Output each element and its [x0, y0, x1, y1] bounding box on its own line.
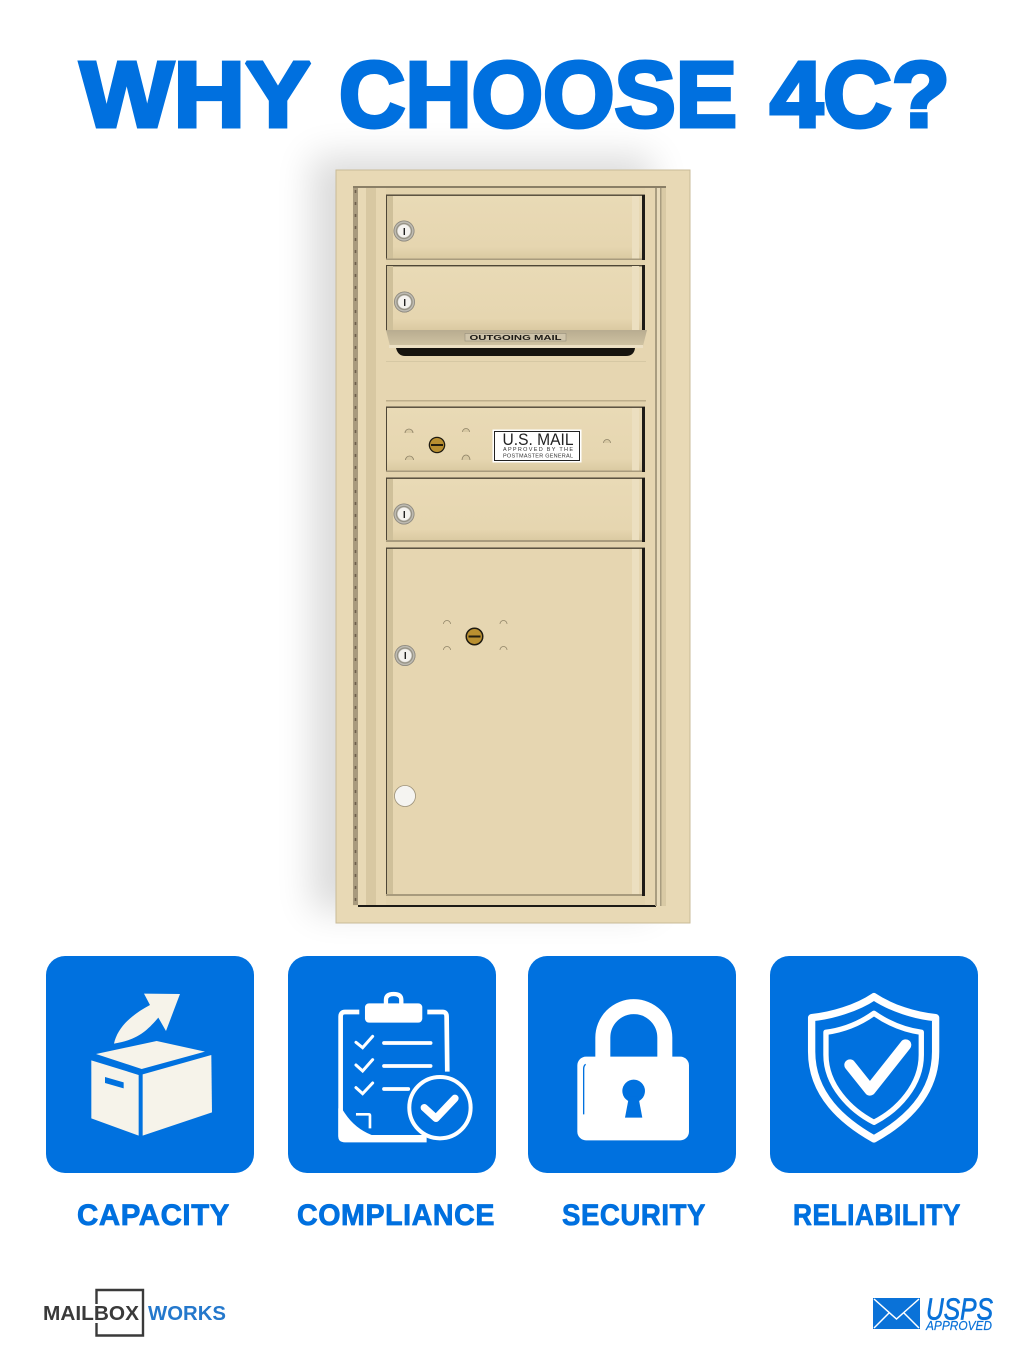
door 4 — [386, 478, 645, 542]
card: reliability icon — [770, 956, 978, 1173]
door 2 — [386, 265, 645, 332]
title: CHOOSE — [339, 42, 737, 146]
door 1 — [386, 194, 645, 260]
U.S. Mail plate: APPROVED BY THE — [503, 447, 573, 453]
icon: envelope — [873, 1298, 920, 1329]
icon: shield with check — [812, 997, 936, 1139]
U.S. Mail plate: U.S. MAIL — [502, 431, 574, 449]
icon: arrow out of box — [114, 994, 180, 1044]
U.S. Mail plate: POSTMASTER GENERAL — [503, 454, 573, 460]
icon: padlock — [577, 1007, 689, 1140]
title: 4C? — [770, 42, 950, 146]
logo: USPS approved — [873, 1292, 993, 1333]
door 3 with U.S. Mail plate — [386, 406, 645, 472]
U.S. Mail plate — [492, 430, 582, 462]
outgoing mail label: OUTGOING MAIL — [470, 333, 562, 342]
logo: Mailbox Works: WORKS — [148, 1303, 226, 1325]
card: compliance icon — [288, 956, 496, 1173]
left hinge strip — [353, 188, 358, 905]
logo: USPS approved: USPS — [926, 1292, 993, 1326]
icon: clipboard — [338, 994, 447, 1142]
mailbox unit illustration — [312, 156, 690, 923]
icon: box — [91, 1041, 212, 1136]
outer frame — [336, 170, 690, 923]
outgoing mail flap — [386, 330, 647, 402]
parcel door — [386, 548, 645, 896]
title — [80, 42, 950, 146]
logo: Mailbox Works — [43, 1290, 226, 1336]
right strip — [645, 188, 655, 905]
label: security: SECURITY — [562, 1199, 706, 1232]
logo: USPS approved: APPROVED — [925, 1319, 992, 1333]
label: reliability: RELIABILITY — [793, 1199, 961, 1232]
label: compliance: COMPLIANCE — [297, 1199, 495, 1232]
logo: Mailbox Works: MAILBOX — [43, 1303, 140, 1325]
card: security icon — [528, 956, 736, 1173]
card: capacity icon — [46, 956, 254, 1173]
icon: check badge — [409, 1077, 471, 1138]
label: capacity: CAPACITY — [77, 1199, 230, 1232]
title: WHY — [80, 42, 311, 146]
